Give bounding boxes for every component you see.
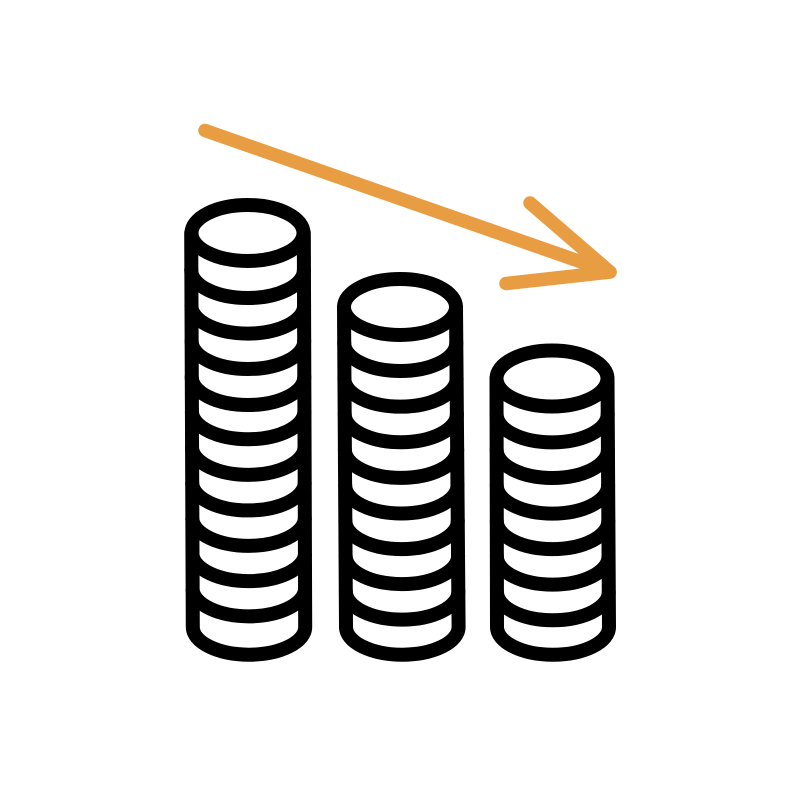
coin stack: tall left — [191, 205, 305, 655]
coin stack: middle — [344, 279, 459, 655]
coin stack: short right — [496, 350, 609, 655]
arrow: downward trend — [205, 130, 610, 284]
